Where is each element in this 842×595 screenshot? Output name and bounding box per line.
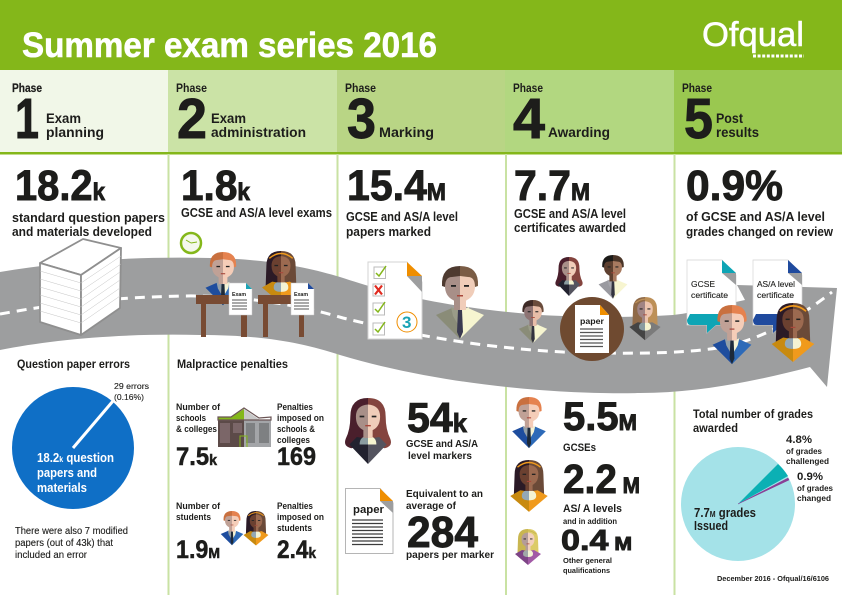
- stat: 2.2M AS/A levels: and in addition: [563, 517, 617, 526]
- stat: 54k markers: GCSE and AS/A: [406, 438, 478, 450]
- logo: Ofqual: Ofqual: [702, 16, 804, 54]
- stat: 5.5M GCSEs: GCSEs: [563, 442, 596, 454]
- stat: 18.2k: 18.2k: [15, 162, 106, 210]
- phase 2 header: administration: [211, 125, 306, 140]
- icon: paper in brown circle: [560, 297, 624, 361]
- stat: 284 papers per marker: average of: [406, 500, 456, 512]
- AS/A level certificate: [753, 260, 802, 333]
- stat: 0.4M other qualifications: qualifications: [563, 566, 610, 575]
- person: student girl with certificate: [772, 303, 814, 362]
- text: grades changed on review: [686, 210, 833, 239]
- stat: 2.2M AS/A levels: AS/ A levels: [563, 503, 622, 515]
- icon: paper in brown circle: paper: [580, 317, 604, 326]
- penalties on students: students: [277, 523, 312, 533]
- text: exams: GCSE and AS/A level exams: [181, 206, 332, 220]
- phase 5 header: 5: [684, 87, 713, 151]
- pie chart: question paper errors: [12, 387, 134, 509]
- phase 1 header: Phase: [12, 83, 42, 95]
- student and desk left: [196, 252, 252, 337]
- label: 29 errors: 29 errors: [114, 381, 149, 391]
- stat: 0.4M other qualifications: 0.4 M: [561, 525, 632, 557]
- text: papers marked: papers marked: [346, 225, 431, 239]
- person: awarder woman bun: [629, 297, 661, 340]
- penalties on schools: 169: [277, 443, 316, 471]
- icon: marked answer sheet: 3: [402, 313, 411, 332]
- text: papers developed: and materials developed: [12, 225, 152, 239]
- pie chart: question paper errors: materials: [37, 480, 87, 495]
- student and desk right: Exam: [294, 292, 309, 298]
- number of students: students: [176, 512, 211, 522]
- note: modified papers: papers (out of 43k) that: [15, 538, 113, 549]
- penalties on schools: schools &: [277, 424, 315, 434]
- header banner: [0, 0, 842, 70]
- text: papers marked: [346, 210, 458, 239]
- pie chart: question paper errors: 18.2k question: [37, 450, 114, 465]
- stat: 54k markers: [406, 394, 478, 462]
- text: certificates awarded: certificates awarded: [514, 221, 626, 235]
- number of students: 1.9M: [176, 536, 220, 564]
- note: modified papers: included an error: [15, 550, 88, 561]
- label: 0.9 percent changed: [797, 471, 833, 503]
- label: 0.9 percent changed: changed: [797, 493, 831, 503]
- heading: total number of grades: [693, 409, 813, 435]
- stat: 0.4M other qualifications: [561, 525, 632, 575]
- road arrow: [0, 258, 837, 393]
- stat: 2.2M AS/A levels: 2.2 M: [563, 456, 640, 502]
- schools and colleges count: [176, 402, 221, 471]
- icon: marked answer sheet: [368, 262, 422, 339]
- person: student boy with certificate: [713, 305, 751, 364]
- stat: 284 papers per marker: Equivalent to an: [406, 488, 483, 500]
- schools and colleges count: Number of: [176, 402, 221, 412]
- phase 4 header: [505, 70, 674, 153]
- phase 1 header: planning: [46, 125, 104, 140]
- penalties on students: 2.4k: [277, 536, 317, 564]
- person: girl AS/A: [510, 460, 548, 512]
- icon: clock: [181, 233, 201, 253]
- heading: total number of grades: Total number of grades: [693, 409, 813, 421]
- phase 3 header: [337, 70, 505, 153]
- label: 4.8 percent challenged: challenged: [786, 456, 829, 466]
- label: 4.8 percent challenged: of grades: [786, 446, 822, 456]
- person: marker with glasses: [436, 266, 484, 339]
- text: certificates awarded: [514, 207, 626, 235]
- stat: 7.7M: 7.7M: [514, 162, 590, 210]
- person: boy GCSE: [512, 397, 546, 448]
- GCSE certificate: certificate: [691, 290, 728, 300]
- phase 2 header: Exam: [211, 111, 246, 126]
- phase 1 header: 1: [15, 87, 39, 151]
- stat: 284 papers per marker: papers per marker: [406, 549, 494, 561]
- heading: total number of grades: awarded: [693, 423, 738, 435]
- stat: 5.5M GCSEs: 5.5M: [563, 395, 637, 439]
- stat: 284 papers per marker: 284: [407, 508, 479, 557]
- stat: 15.4M: 15.4M: [347, 162, 446, 210]
- penalties on students: Penalties: [277, 501, 313, 511]
- text: papers developed: standard question papers: [12, 211, 165, 225]
- number of students: Number of: [176, 501, 221, 511]
- phase 5 header: results: [716, 125, 759, 140]
- pie chart: grades: 7.7M grades: [694, 505, 756, 520]
- person: awarder woman: [555, 257, 583, 296]
- text: papers developed: [12, 211, 165, 239]
- GCSE certificate: GCSE: [691, 279, 715, 289]
- stat: 0.9%: 0.9%: [686, 162, 783, 210]
- penalties on schools: Penalties: [277, 402, 313, 412]
- phase 1 header: Exam: [46, 111, 81, 126]
- label: 4.8 percent challenged: 4.8%: [786, 434, 812, 446]
- stat: 284 papers per marker: [406, 488, 494, 561]
- phase 3 header: Marking: [379, 125, 434, 140]
- icon: small boy: [221, 511, 243, 545]
- GCSE certificate: [687, 260, 736, 333]
- penalties on schools: colleges: [277, 435, 310, 445]
- phase 1 header: [0, 70, 168, 153]
- student and desk right: [258, 251, 314, 337]
- note: modified papers: [15, 526, 128, 561]
- phase 3 header: 3: [347, 87, 376, 151]
- AS/A level certificate: certificate: [757, 290, 794, 300]
- stat: 54k markers: level markers: [408, 450, 472, 462]
- person: woman marker: [345, 398, 391, 464]
- phase 5 header: Phase: [682, 83, 712, 95]
- phase 4 header: Awarding: [548, 125, 610, 140]
- penalties on schools: imposed on: [277, 413, 324, 423]
- note: modified papers: There were also 7 modified: [15, 526, 128, 537]
- pie chart: grades: Issued: [694, 518, 728, 533]
- schools and colleges count: & colleges: [176, 424, 217, 434]
- phase 2 header: Phase: [176, 83, 207, 95]
- label: 4.8 percent challenged: [786, 434, 829, 466]
- text: grades changed on review: grades changed on review: [686, 225, 833, 239]
- stat: 0.4M other qualifications: Other general: [563, 556, 612, 565]
- schools and colleges count: schools: [176, 413, 206, 423]
- text: grades changed on review: of GCSE and AS/A level: [686, 210, 825, 224]
- student and desk left: Exam: [232, 292, 247, 298]
- penalties on students: [277, 501, 324, 564]
- phase 4 header: Phase: [513, 83, 543, 95]
- person: blonde other qualifications: [515, 529, 541, 565]
- icon: paper: paper: [353, 504, 385, 516]
- phase 2 header: [168, 70, 337, 153]
- icon: paper: [346, 488, 393, 554]
- footer reference: December 2016 - Ofqual/16/6106: [717, 576, 829, 583]
- penalties on schools: [277, 402, 324, 471]
- stat: 2.2M AS/A levels: [563, 456, 640, 526]
- phase 4 header: 4: [513, 87, 545, 151]
- number of students: [176, 501, 221, 564]
- title: Summer exam series 2016: [22, 26, 437, 65]
- label: 0.9 percent changed: of grades: [797, 483, 833, 493]
- heading: question paper errors: Question paper errors: [17, 359, 130, 371]
- label: 0.9 percent changed: 0.9%: [797, 471, 823, 483]
- phase 5 header: Post: [716, 111, 743, 126]
- phase 3 header: Phase: [345, 83, 376, 95]
- label: 29 errors: (0.16%): [114, 392, 144, 402]
- icon: school building: [218, 408, 271, 447]
- label: 29 errors: [114, 381, 149, 402]
- schools and colleges count: 7.5k: [176, 443, 218, 471]
- person: awarder man light: [519, 300, 547, 343]
- phase 2 header: 2: [177, 87, 207, 151]
- heading: malpractice penalties: Malpractice penalties: [177, 359, 288, 371]
- stat: 1.8k: 1.8k: [181, 162, 251, 210]
- penalties on students: imposed on: [277, 512, 324, 522]
- pie chart: grades: [681, 447, 795, 561]
- pie chart: question paper errors: papers and: [37, 465, 97, 480]
- phase 5 header: [674, 70, 842, 153]
- stat: 54k markers: 54k: [407, 394, 468, 441]
- person: awarder man dark: [599, 255, 627, 299]
- icon: stack of papers: [40, 239, 121, 335]
- text: certificates awarded: GCSE and AS/A level: [514, 207, 626, 221]
- AS/A level certificate: AS/A level: [757, 279, 795, 289]
- text: papers marked: GCSE and AS/A level: [346, 210, 458, 224]
- icon: small girl: [244, 511, 268, 546]
